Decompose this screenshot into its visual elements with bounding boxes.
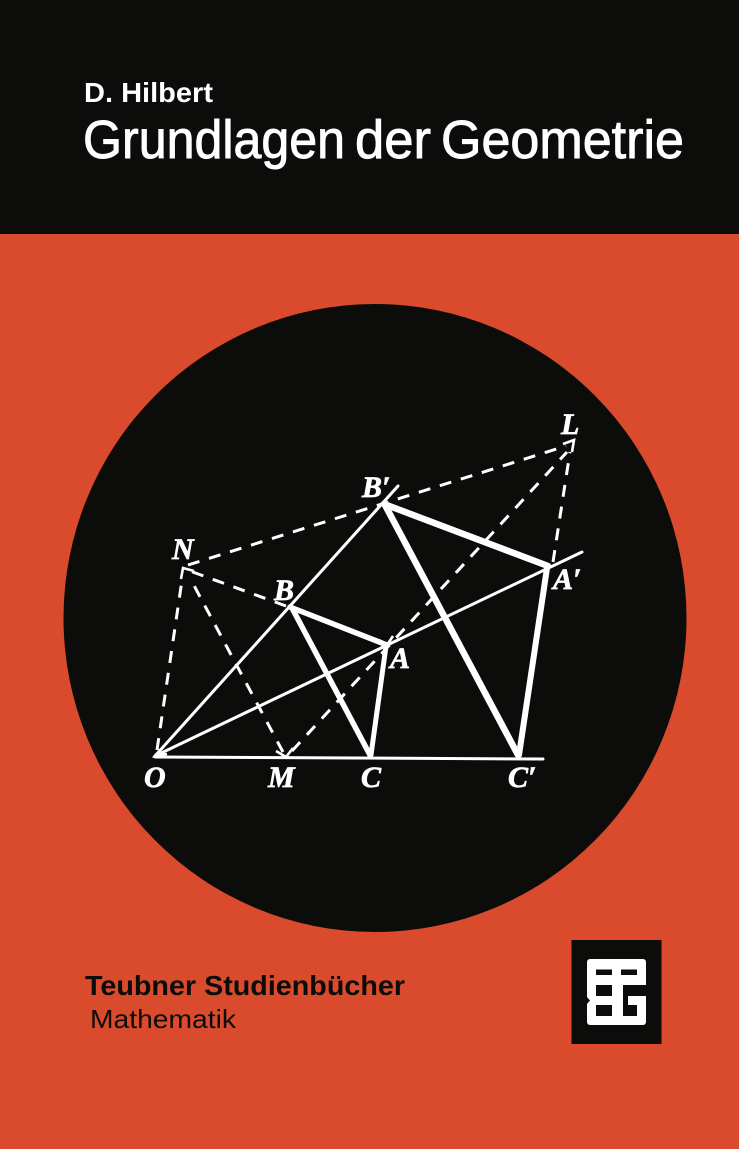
large triangle A'B'C' (384, 504, 548, 755)
point labels: C (361, 761, 382, 794)
title: Grundlagen (83, 110, 345, 170)
series name: Teubner Studienbücher (85, 970, 405, 1001)
black circle with geometry diagram (64, 304, 686, 932)
title (83, 110, 684, 170)
point labels: B (273, 574, 294, 607)
point labels: A (388, 642, 410, 675)
point labels: C′ (508, 761, 536, 794)
title: der (355, 110, 431, 170)
point labels: O (144, 761, 166, 794)
title: Geometrie (441, 110, 684, 170)
point labels: M (267, 761, 296, 794)
arrowheads (155, 440, 574, 757)
point labels: N (171, 533, 195, 566)
point labels: B′ (361, 471, 390, 504)
dashed construction lines (157, 446, 570, 752)
point labels (144, 408, 581, 794)
thin rays from O (155, 486, 582, 759)
point labels: A′ (551, 563, 581, 596)
subject label: Mathematik (90, 1004, 237, 1034)
point labels: L (560, 408, 579, 441)
header band (0, 0, 739, 234)
author name: D. Hilbert (84, 77, 213, 108)
publisher logo (572, 940, 662, 1044)
small triangle ABC (290, 607, 387, 755)
